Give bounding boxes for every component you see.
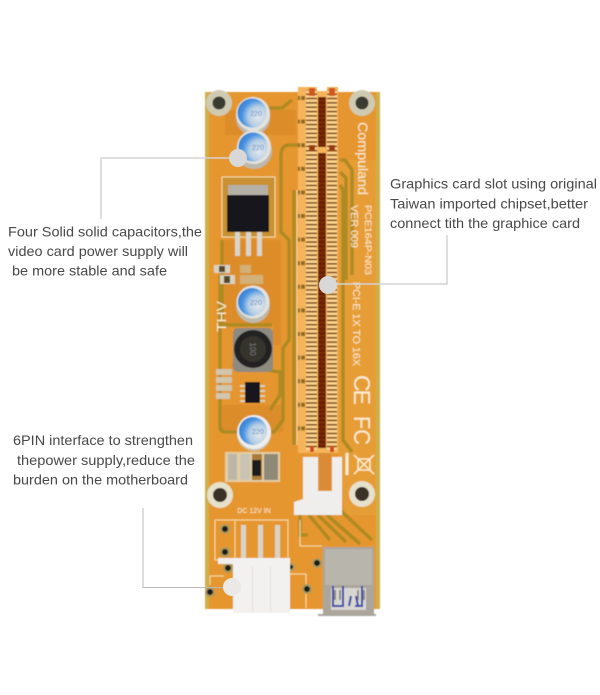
icon: mounting holes xyxy=(206,90,375,508)
text block: be more stable and safe xyxy=(12,264,167,278)
darker copper regions xyxy=(222,110,296,432)
icon: capacitor 2: 220 xyxy=(252,145,264,152)
text block: 6PIN interface to strengthen xyxy=(13,433,193,448)
icon: capacitor 3 xyxy=(236,286,270,323)
icon: capacitor 2 xyxy=(236,130,272,169)
callout dot xyxy=(319,276,337,294)
text block: connect tith the graphice card xyxy=(390,216,580,231)
copper traces xyxy=(220,100,372,544)
icon: capacitor 4: 220 xyxy=(252,429,264,436)
icon: 6-pin power connector xyxy=(218,558,290,613)
panel: circuit board xyxy=(205,92,380,609)
icon: voltage regulator xyxy=(222,177,275,256)
board label: model: PCE164P-N03 xyxy=(363,205,373,275)
icon: capacitor 3: 220 xyxy=(250,300,262,307)
right side copper region xyxy=(338,160,376,515)
text block: thepower supply,reduce the xyxy=(17,453,195,468)
icon: vias and solder points xyxy=(206,525,321,596)
board label: CE mark: CE xyxy=(349,375,375,405)
text block: burden on the motherboard xyxy=(13,472,188,488)
text block: Four Solid solid capacitors,the xyxy=(8,224,202,240)
icon: white slot bracket xyxy=(294,457,342,515)
board label: version: VER 009 xyxy=(348,205,359,248)
icon: capacitor 1: 220 xyxy=(250,111,262,118)
board label: DC 12V IN: DC 12V IN xyxy=(237,508,271,515)
board label: slot type: PCI-E 1X TO 16X xyxy=(350,282,362,366)
callout: capacitors xyxy=(8,149,247,278)
icon: capacitor 4 xyxy=(237,415,271,451)
graphics card riser board xyxy=(205,87,380,616)
text block: Taiwan imported chipset,better xyxy=(390,196,588,212)
board edge strips xyxy=(205,92,380,609)
callout dot xyxy=(229,149,247,167)
text block: video card power supply will xyxy=(8,244,188,259)
board label: THV: THV xyxy=(214,301,229,332)
board label: Compuland: Compuland xyxy=(355,122,371,195)
text block xyxy=(8,224,202,278)
leader line xyxy=(335,235,447,284)
thin white silkscreen outlines xyxy=(210,190,322,608)
callout: 6-pin interface xyxy=(13,433,241,596)
text block xyxy=(13,433,195,488)
icon: SMD block xyxy=(225,452,280,482)
leader line xyxy=(143,508,226,588)
slot tab between bracket arms xyxy=(319,453,331,490)
icon: connector pins xyxy=(241,525,280,559)
icon: capacitor 1 xyxy=(236,97,270,135)
icon: USB 3.0 port xyxy=(318,547,376,616)
callout dot xyxy=(223,578,241,596)
icon: controller chip xyxy=(240,382,265,403)
icon: small SMD parts xyxy=(214,265,263,399)
board label: FC mark: FC xyxy=(349,416,375,445)
icon: recycling bin mark xyxy=(347,453,374,475)
icon: inductor xyxy=(233,328,273,372)
text block xyxy=(390,176,597,231)
callout: graphics card slot xyxy=(319,176,597,294)
leader line xyxy=(101,158,232,219)
icon: PCI-E x16 slot xyxy=(298,87,338,453)
text block: Graphics card slot using original xyxy=(390,176,597,192)
icon: inductor: 100 xyxy=(248,342,257,356)
